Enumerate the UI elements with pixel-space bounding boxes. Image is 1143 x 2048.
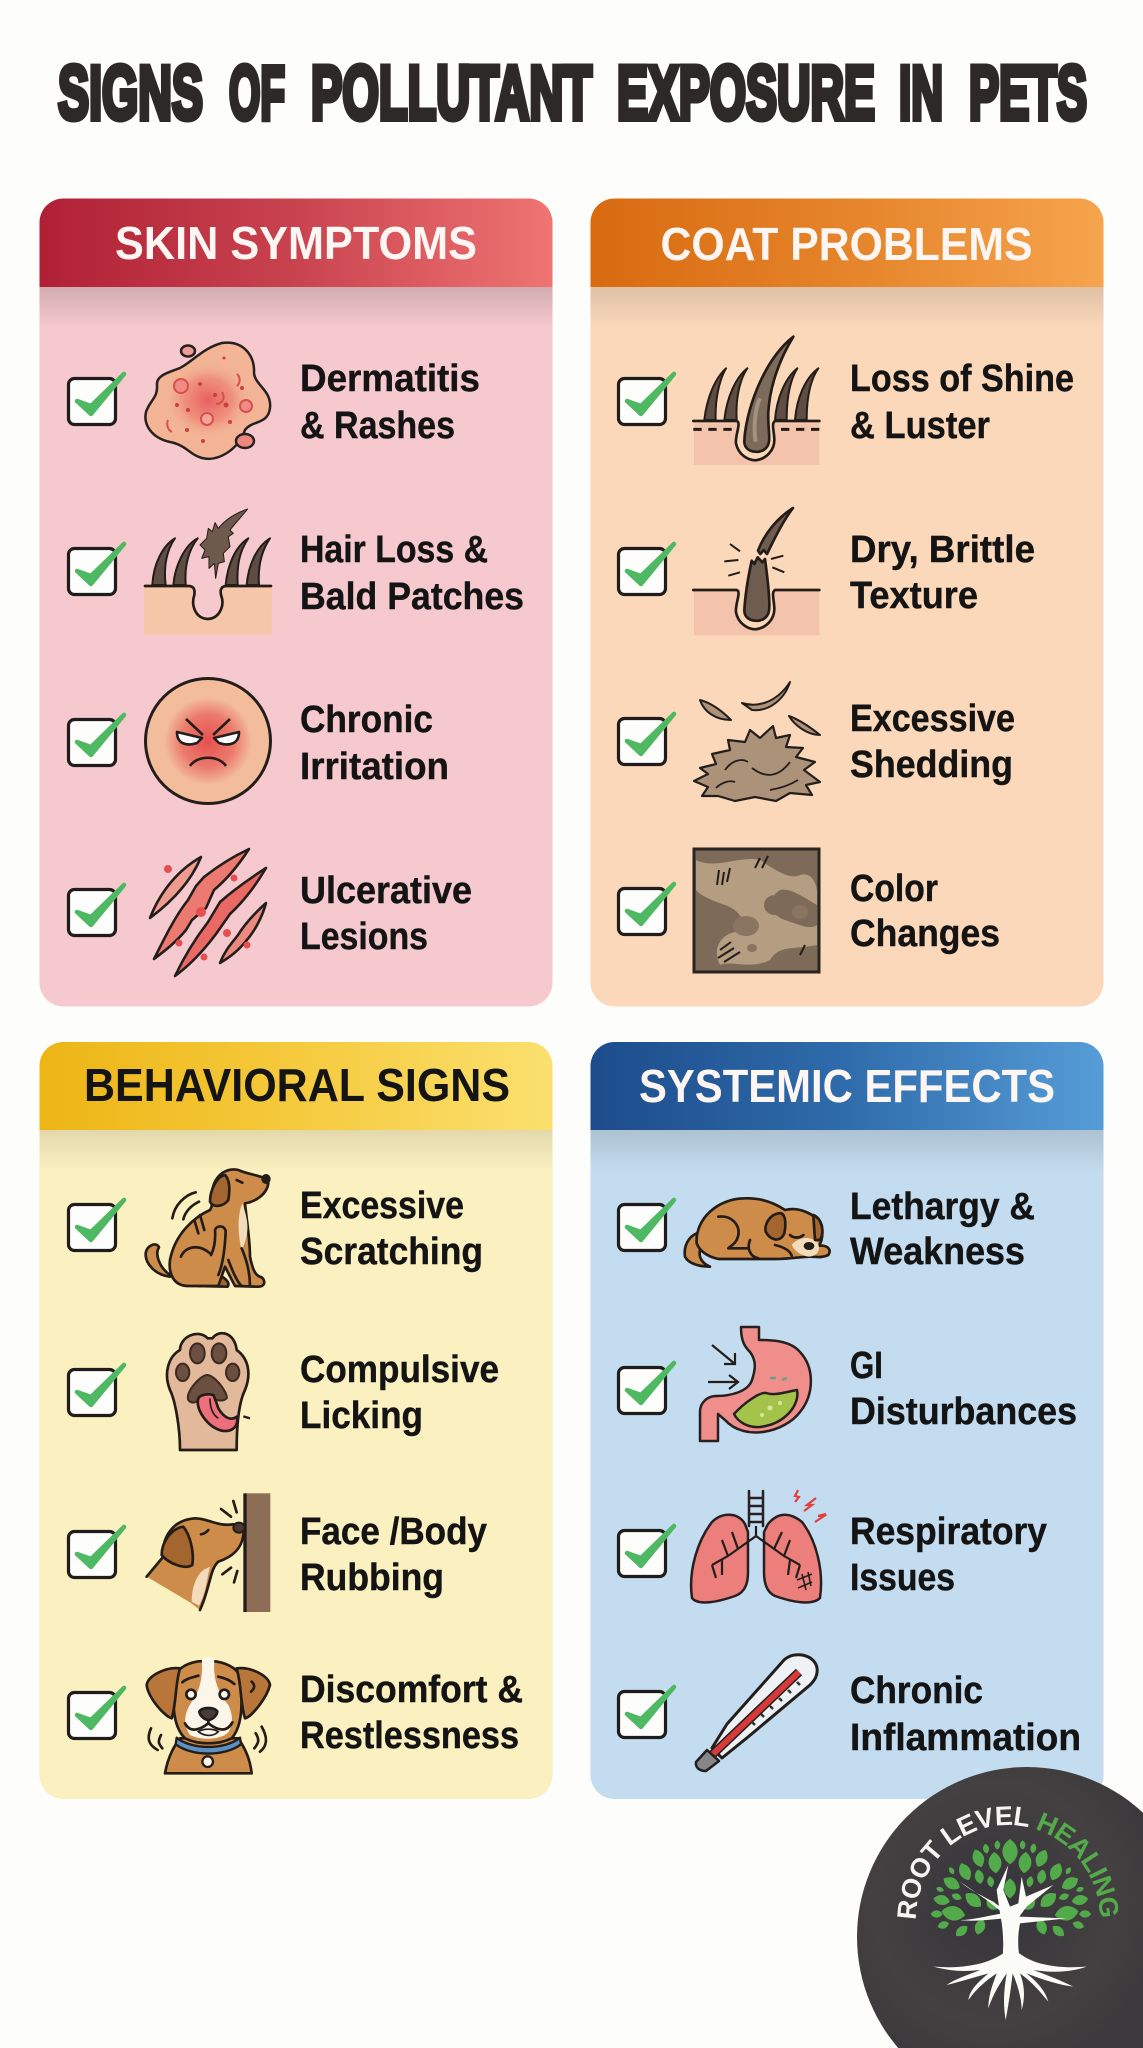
label: excessive shedding: Excessive [850,698,1015,740]
icon: dermatitis rash [145,343,270,459]
label: compulsive licking [300,1349,499,1437]
label: ulcerative lesions: Ulcerative [300,870,472,912]
label: chronic irritation [300,699,449,788]
icon: sleeping dog [685,1198,830,1267]
icon: hair without shine [693,337,820,465]
label: discomfort and restlessness [300,1669,523,1757]
icon: restless dog [147,1657,270,1773]
checkbox [68,1527,124,1578]
icon: irritated face [146,678,270,804]
title: OF [229,51,285,136]
label: chronic irritation: Irritation [300,746,449,788]
header: coat problems [590,198,1104,287]
checkbox [68,374,124,424]
checkbox [68,715,124,766]
label: lethargy and weakness: Weakness [850,1231,1025,1273]
label: hair loss and bald patches: Hair Loss & [300,529,488,571]
label: lethargy and weakness: Lethargy & [850,1186,1035,1228]
label: chronic inflammation [850,1670,1081,1759]
label: respiratory issues: Respiratory [850,1511,1047,1553]
label: face and body rubbing [300,1511,487,1599]
label: excessive scratching: Excessive [300,1185,464,1227]
label: loss of shine and luster: Loss of Shine [850,358,1074,400]
label: lethargy and weakness [850,1186,1035,1273]
panel: skin symptoms [40,198,552,1006]
header: skin symptoms [40,198,552,287]
panel: systemic effects [590,1042,1104,1799]
label: ulcerative lesions [300,870,472,958]
title: POLLUTANT [311,51,592,136]
header: systemic effects: SYSTEMIC EFFECTS [639,1060,1055,1112]
checkbox [618,374,674,424]
label: gi disturbances: Disturbances [850,1391,1077,1433]
label: color changes: Color [850,868,938,910]
label: face and body rubbing: Rubbing [300,1557,444,1599]
title: SIGNS [58,51,203,136]
icon: dog rubbing against wall [147,1493,270,1612]
icon: hair loss [144,509,272,634]
checkbox [68,1688,124,1738]
panel: behavioral signs [40,1042,552,1799]
label: dermatitis and rashes [300,358,480,447]
label: hair loss and bald patches: Bald Patches [300,576,524,618]
header: skin symptoms: SKIN SYMPTOMS [115,217,477,269]
logo text: ROOT LEVEL HEALING [897,1806,1118,1918]
icon: scratching dog [146,1169,271,1287]
title: EXPOSURE [617,51,875,136]
label: hair loss and bald patches [300,529,524,618]
label: excessive scratching [300,1185,483,1273]
checkbox [68,1200,124,1250]
checkbox [618,1687,674,1738]
header: behavioral signs: BEHAVIORAL SIGNS [84,1059,510,1111]
checkbox [618,884,674,934]
label: dry brittle texture: Texture [850,575,978,617]
checkbox [618,1200,674,1250]
label: chronic inflammation: Inflammation [850,1717,1081,1759]
checkbox [68,544,124,594]
label: discomfort and restlessness: Restlessness [300,1715,519,1757]
icon: stomach [700,1327,811,1441]
checkbox [618,544,674,594]
label: compulsive licking: Licking [300,1395,423,1437]
title: IN [899,51,943,136]
label: chronic inflammation: Chronic [850,1670,983,1712]
header: systemic effects [590,1042,1104,1130]
checkbox [618,1526,674,1576]
icon: lungs [691,1490,826,1602]
label: dry brittle texture [850,529,1035,617]
label: compulsive licking: Compulsive [300,1349,499,1391]
label: loss of shine and luster: & Luster [850,405,990,447]
label: color changes [850,868,1000,955]
icon: brittle hair [693,508,819,635]
label: respiratory issues [850,1511,1047,1599]
icon: ulcerative lesions [150,849,266,976]
label: chronic irritation: Chronic [300,699,433,741]
logo tree [931,1839,1091,2020]
header: coat problems: COAT PROBLEMS [660,218,1032,270]
checkbox [68,1365,124,1416]
label: discomfort and restlessness: Discomfort & [300,1669,523,1711]
icon: thermometer [696,1655,817,1771]
title [58,51,1087,136]
label: color changes: Changes [850,913,1000,955]
header: behavioral signs [40,1042,552,1130]
logo: root level healing [857,1767,1143,2048]
label: dermatitis and rashes: & Rashes [300,405,455,447]
label: gi disturbances: GI [850,1345,883,1387]
label: gi disturbances [850,1345,1077,1433]
panel: coat problems [590,198,1104,1006]
label: dermatitis and rashes: Dermatitis [300,358,480,400]
checkbox [68,885,124,936]
label: excessive shedding: Shedding [850,744,1013,786]
label: dry brittle texture: Dry, Brittle [850,529,1035,571]
checkbox [618,714,674,764]
label: respiratory issues: Issues [850,1557,955,1599]
label: loss of shine and luster [850,358,1074,447]
label: excessive scratching: Scratching [300,1231,483,1273]
icon: coat colour patches [694,849,819,972]
icon: shed fur pile [694,682,820,801]
label: face and body rubbing: Face /Body [300,1511,487,1553]
checkbox [618,1363,674,1414]
label: excessive shedding [850,698,1015,786]
icon: licking paw [167,1333,250,1450]
label: ulcerative lesions: Lesions [300,916,428,958]
